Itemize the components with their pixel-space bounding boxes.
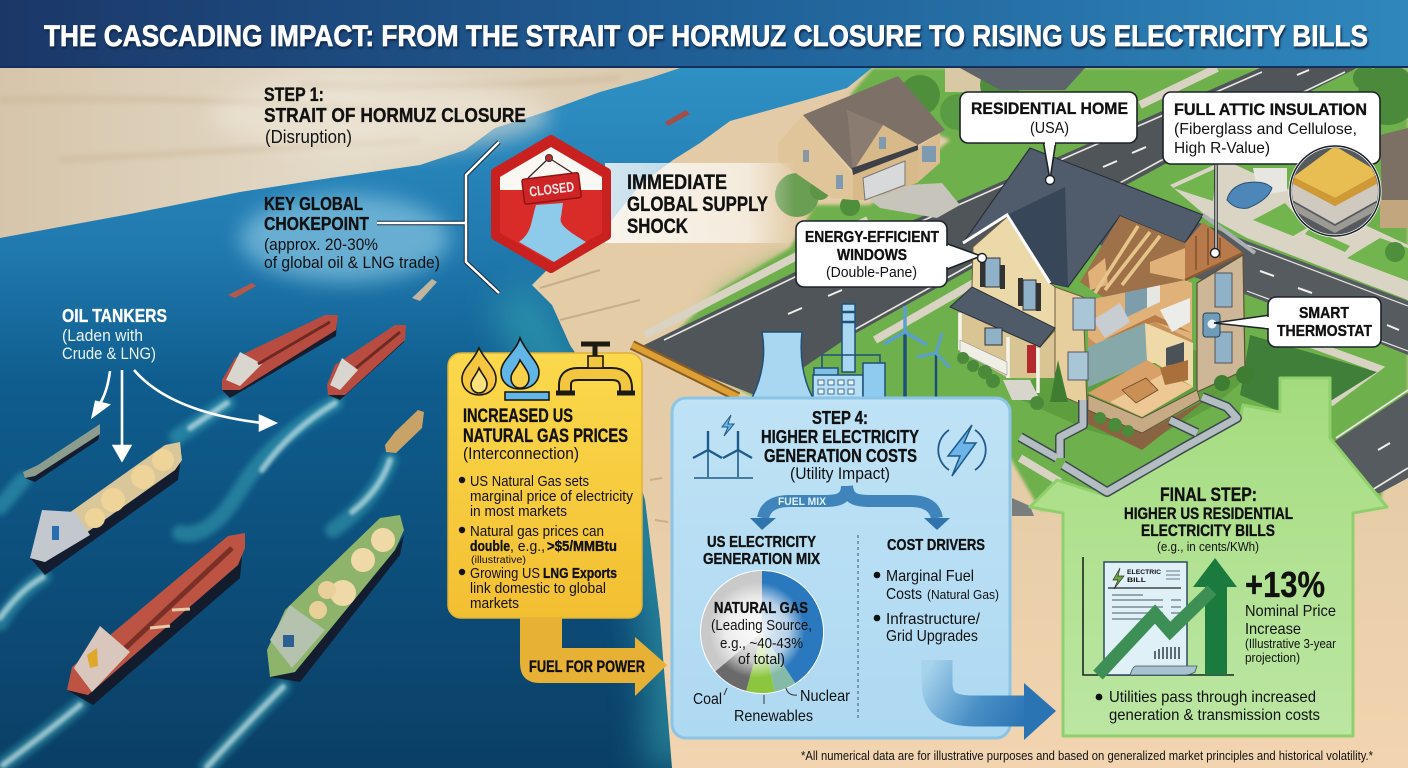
closed sign: CLOSED (528, 178, 575, 200)
main residential house cutaway (950, 148, 1255, 450)
ship: red tanker center (222, 315, 338, 398)
electric bill chart: BILL (1127, 577, 1146, 584)
panel: increased US natural gas prices (448, 338, 667, 696)
heading: NATURAL GAS PRICES (463, 426, 628, 447)
neighboring house (778, 68, 1408, 228)
bullet list: markets (470, 596, 519, 612)
arrows: fuel mix split: FUEL MIX (778, 496, 827, 508)
pie chart: generation mix: of total) (738, 651, 785, 668)
bullet list: marginal price of electricity (470, 489, 634, 505)
arrow: fuel for power: FUEL FOR POWER (529, 657, 645, 676)
callout: full attic insulation: High R-Value) (1174, 140, 1270, 157)
callout: energy-efficient windows: WINDOWS (837, 247, 907, 264)
bullet list: Growing US (470, 566, 540, 582)
heading: HIGHER ELECTRICITY (761, 427, 919, 447)
heading: (Interconnection) (463, 444, 579, 463)
heading: (e.g., in cents/KWh) (1157, 540, 1259, 554)
icon: insulation cross section (1285, 146, 1385, 236)
step 1 heading: STRAIT OF HORMUZ CLOSURE (264, 105, 526, 127)
pie labels: Renewables (734, 708, 813, 725)
immediate supply shock panel: SHOCK (627, 215, 688, 238)
icon: wind turbines with bolt (693, 415, 753, 478)
heading: INCREASED US (463, 406, 573, 427)
oil tankers fleet (0, 110, 690, 767)
cost drivers: Grid Upgrades (886, 628, 978, 645)
callout: full attic insulation (1163, 92, 1385, 258)
immediate supply shock panel: GLOBAL SUPPLY (627, 193, 768, 216)
callout: energy-efficient windows (796, 221, 986, 287)
key global chokepoint text: (approx. 20-30% (264, 235, 378, 254)
pie chart: generation mix: (Leading Source, (711, 617, 812, 634)
pie labels: Coal (693, 691, 722, 708)
bullet list: >$5/MMBtu (547, 539, 617, 555)
immediate supply shock panel (605, 163, 795, 243)
callout: residential home: RESIDENTIAL HOME (971, 99, 1128, 118)
bullet list: US Natural Gas sets (470, 474, 589, 490)
ship: red tanker right (327, 325, 406, 400)
electric bill chart: ELECTRIC (1127, 569, 1161, 576)
key global chokepoint text: CHOKEPOINT (264, 214, 369, 234)
generation mix heading: US ELECTRICITY (707, 534, 816, 551)
generation mix heading (703, 534, 820, 568)
bullet list: Natural gas prices can (470, 524, 604, 540)
bullet list: (illustrative) (471, 555, 526, 566)
bracket connector (377, 142, 499, 293)
callout: residential home: (USA) (1030, 120, 1069, 137)
arrow: fuel for power (520, 610, 667, 696)
bullet: utilities pass through: generation & transmission costs (1109, 707, 1320, 724)
bullet list (459, 474, 634, 612)
stat: plus 13 percent: Nominal Price (1245, 603, 1336, 620)
title banner (0, 0, 1408, 68)
arrow: utility costs to bills (937, 660, 1056, 740)
arrows: tankers pointer (93, 370, 275, 460)
pie labels (693, 688, 851, 725)
icon: closed strait hexagon badge (495, 139, 607, 269)
icon: lightning bolt in circle (938, 425, 986, 476)
icon: flame (462, 348, 496, 395)
bullet list: LNG Exports (543, 566, 617, 582)
heading (1124, 485, 1293, 554)
oil tankers label (62, 306, 167, 363)
heading: FINAL STEP: (1160, 485, 1257, 506)
cost drivers: Infrastructure/ (886, 611, 981, 628)
stat: plus 13 percent: (Illustrative 3-year (1245, 637, 1336, 651)
ship: LNG carrier green deck (267, 515, 404, 682)
callout: full attic insulation: FULL ATTIC INSULATION (1174, 100, 1367, 119)
generation mix heading: GENERATION MIX (703, 551, 820, 568)
bullet list: in most markets (470, 504, 567, 520)
pie chart: generation mix: e.g., ~40-43% (720, 635, 803, 652)
heading: (Utility Impact) (790, 465, 890, 483)
panel: final step house (1030, 378, 1387, 736)
wakes (0, 403, 390, 767)
bullet: utilities pass through (1096, 689, 1320, 724)
ship: large red crude tanker (67, 533, 245, 705)
heading: ELECTRICITY BILLS (1141, 522, 1275, 540)
key global chokepoint text (264, 194, 440, 272)
icon: power plant and wind turbines (735, 304, 950, 398)
stat: plus 13 percent: Increase (1245, 621, 1301, 638)
icon: gas pipe valve (556, 344, 635, 393)
pie chart: generation mix: NATURAL GAS (714, 600, 808, 617)
gas pipeline to the home (1020, 397, 1237, 492)
step 1 heading: STEP 1: (264, 85, 324, 106)
heading: STEP 4: (812, 408, 868, 428)
bullet list: , e.g., (510, 539, 545, 555)
stat: plus 13 percent (1245, 564, 1336, 665)
electric bill chart (1083, 557, 1237, 675)
callout: energy-efficient windows: (Double-Pane) (826, 264, 917, 281)
stat: plus 13 percent: projection) (1245, 651, 1300, 665)
arrows: fuel mix split (750, 486, 950, 530)
oil tankers label: OIL TANKERS (62, 306, 167, 326)
cost drivers (874, 537, 999, 645)
panel: step 4 higher electricity generation costs (672, 398, 1010, 738)
callout: smart thermostat (1214, 297, 1381, 347)
bullet list: double (470, 539, 510, 555)
key global chokepoint text: of global oil & LNG trade) (264, 253, 440, 272)
callout: energy-efficient windows: ENERGY-EFFICIENT (805, 229, 939, 246)
step 1 heading (264, 85, 526, 147)
heading (463, 406, 628, 463)
bullet list: link domestic to global (470, 581, 606, 597)
oil tankers label: (Laden with (62, 326, 143, 345)
ship: small tankers (23, 110, 690, 482)
cost drivers: Marginal Fuel (886, 568, 974, 585)
heading: HIGHER US RESIDENTIAL (1124, 505, 1293, 523)
immediate supply shock panel: IMMEDIATE (627, 171, 727, 194)
heading (761, 408, 919, 483)
key global chokepoint text: KEY GLOBAL (264, 194, 363, 214)
heading: GENERATION COSTS (764, 446, 917, 466)
callout: full attic insulation: (Fiberglass and Cellulose, (1174, 121, 1357, 138)
icon: smart thermostat device (1203, 313, 1220, 337)
stat: plus 13 percent: +13% (1245, 564, 1325, 605)
icon: gas burner (501, 338, 549, 400)
cost drivers: (Natural Gas) (927, 588, 999, 602)
step 1 heading: (Disruption) (265, 127, 352, 147)
pie labels: Nuclear (800, 688, 851, 705)
background: suburban neighborhood (632, 65, 1408, 516)
cost drivers: Costs (886, 586, 922, 603)
callout: residential home (960, 92, 1137, 184)
callout: smart thermostat: THERMOSTAT (1277, 323, 1372, 340)
oil tankers label: Crude & LNG) (62, 344, 156, 363)
ship: LNG carrier yellow domes (30, 442, 182, 575)
cost drivers: COST DRIVERS (887, 537, 985, 554)
arrow: rising prices (1193, 558, 1237, 675)
bullet: utilities pass through: Utilities pass through increased (1109, 689, 1316, 706)
callout: smart thermostat: SMART (1299, 305, 1349, 322)
pie chart: generation mix (700, 570, 824, 694)
